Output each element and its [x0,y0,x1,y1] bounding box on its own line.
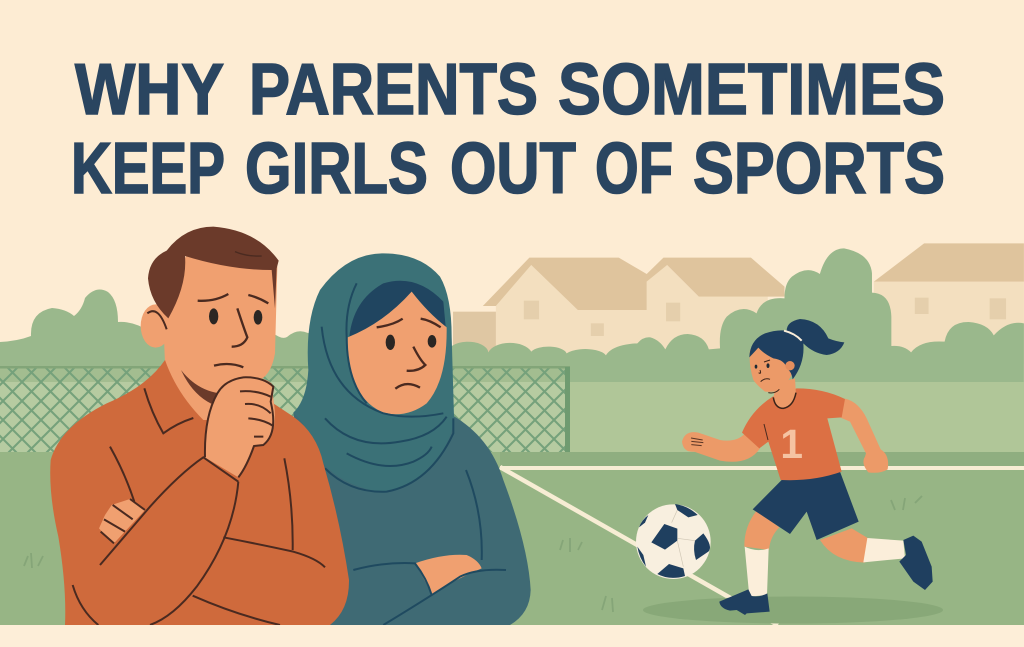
mother in hijab [293,253,531,625]
father shirt [50,360,349,625]
grass tufts [24,496,922,612]
fence [0,366,570,452]
girl shirt number: 1 [780,421,803,467]
ground shadow [643,596,943,624]
grass band [570,382,1024,453]
girl shorts [753,472,859,540]
field [0,452,1024,625]
father hair [148,227,279,318]
pitch lines [500,467,1024,625]
father neck and face [163,253,277,420]
girl left arm [682,432,760,462]
father ear [141,304,171,348]
title: PARENTS [249,50,538,130]
title: WHY [75,50,224,130]
mother scarf [293,253,454,492]
mother face features [377,319,441,389]
bushes left [0,290,460,382]
father collar [73,388,293,625]
girl face features [755,360,796,408]
girl back sock and boot [863,536,933,590]
bottom strip [0,625,1024,647]
girl shirt [742,388,845,480]
girl playing soccer [682,319,933,615]
girl front sock and boot [719,547,770,615]
title: OF [595,129,673,209]
father jaw shadow [181,370,219,405]
title [71,50,945,209]
houses in background [453,243,1024,363]
mother body [293,413,531,625]
title: OUT [450,129,576,209]
title: KEEP [71,129,225,209]
title: GIRLS [245,129,428,209]
mother arm and hand [353,470,506,625]
father [50,227,349,625]
mother scarf folds [322,283,453,492]
father folded hand [99,499,145,544]
father hand on chin [205,377,275,477]
girl back leg [820,528,868,563]
girl neck and head [773,378,796,408]
soccer ball [636,504,711,579]
girl right arm [840,399,888,473]
bushes right [447,248,1024,387]
father crossed arms [100,457,325,625]
father face features [198,294,268,367]
mother hair [349,281,446,337]
mother face [348,292,447,414]
girl front leg [744,511,779,550]
girl ponytail and hair [749,319,844,379]
title: SPORTS [693,129,945,209]
title: SOMETIMES [558,50,945,130]
